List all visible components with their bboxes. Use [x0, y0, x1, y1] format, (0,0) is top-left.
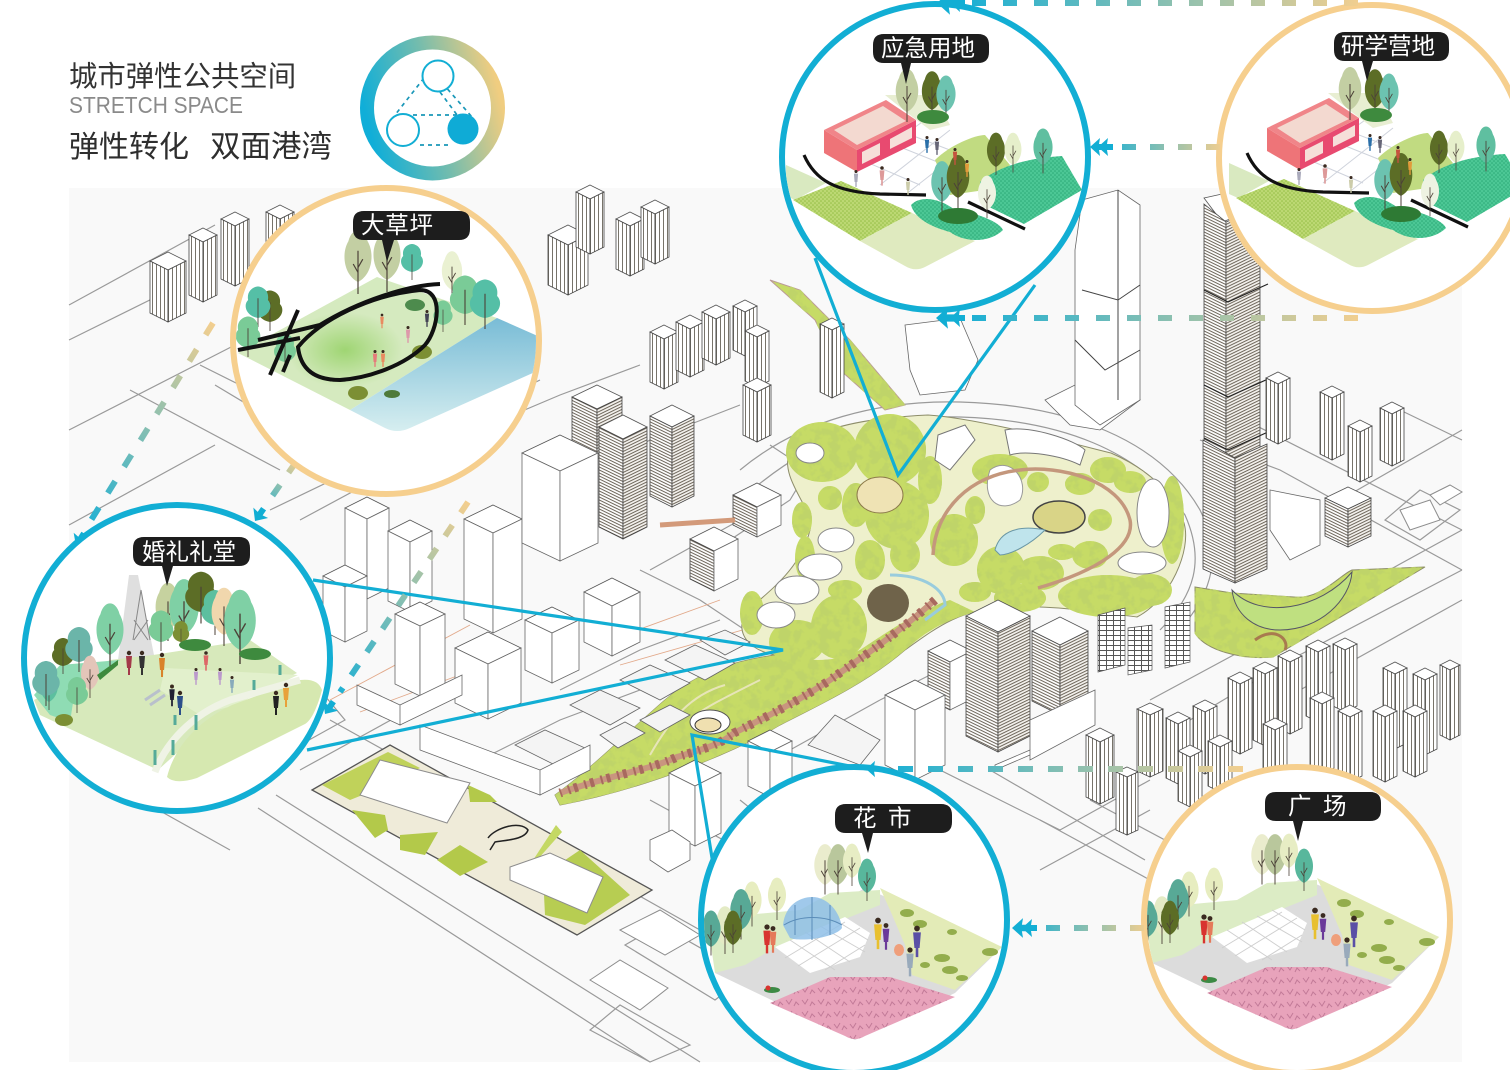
flower belt — [560, 600, 935, 793]
circle: study camp — [1219, 5, 1510, 311]
circle: square — [1138, 767, 1450, 1070]
label: square: 广 — [1288, 793, 1312, 819]
bottom left lot — [312, 745, 652, 935]
title block: STRETCH SPACE — [69, 92, 243, 118]
leader lines: wedding hall — [307, 580, 783, 750]
map background panel — [69, 188, 1462, 1062]
glass dome — [783, 897, 842, 940]
dashed arrow: square to flower market — [1012, 918, 1146, 938]
dashed arrow: study camp to emergency land — [1090, 138, 1220, 156]
ground of wedding vignette — [34, 640, 297, 770]
logo: stretch space — [367, 42, 498, 174]
label: square — [1265, 792, 1381, 841]
circle: big lawn — [233, 188, 540, 494]
circle: emergency land — [782, 4, 1088, 310]
grey paving — [715, 888, 1002, 1040]
wedding guests — [126, 651, 289, 765]
white low-rise and towers, left cluster — [323, 497, 792, 872]
white path — [155, 680, 300, 772]
park cream ground — [555, 415, 1186, 805]
dark hatched towers, left of park — [522, 385, 781, 591]
lawn — [935, 135, 1010, 195]
circle: wedding hall — [24, 505, 330, 811]
title block: 弹性转化 — [69, 131, 189, 164]
plaza grid — [826, 115, 965, 200]
central park area — [555, 414, 1186, 805]
circle: flower market — [701, 767, 1007, 1070]
dashed arrow: park to wedding hall — [318, 502, 468, 719]
central hatched towers and grid towers — [885, 600, 1190, 780]
meadow — [880, 888, 1002, 990]
trees of wedding vignette — [32, 572, 271, 726]
tower of wedding hall — [118, 575, 155, 660]
trees of lawn vignette — [236, 228, 500, 400]
light field — [860, 213, 975, 269]
black road — [804, 155, 1025, 229]
label: emergency land: 应急用地 — [881, 35, 975, 61]
label: big lawn — [353, 211, 470, 262]
title block: 双面港湾 — [210, 130, 332, 164]
trees of market — [701, 844, 876, 956]
dashed arrow: top link — [937, 0, 1368, 15]
picnic people — [373, 310, 429, 367]
dashed arrow: lawn to wedding hall — [248, 462, 296, 526]
mid-rise blocks along boulevard — [515, 630, 880, 765]
trees — [896, 69, 1053, 224]
hatched residential towers, top middle — [650, 300, 978, 442]
tall towers, centre right — [1045, 190, 1462, 583]
residential slabs, bottom right — [1086, 638, 1460, 835]
leader lines: flower market — [692, 735, 880, 870]
dashed arrow: square to flower market upper — [866, 761, 1245, 777]
label: square: 场 — [1323, 793, 1346, 819]
label: big lawn: 大草坪 — [361, 212, 433, 238]
road network — [69, 225, 1462, 1062]
meadow shrubs — [900, 909, 998, 981]
label: flower market: 市 — [888, 805, 912, 831]
people — [854, 136, 969, 195]
hatched field — [793, 181, 912, 241]
label: wedding hall: 婚礼礼堂 — [142, 539, 236, 565]
pink flower field — [770, 977, 955, 1039]
top green strip behind emergency callout — [770, 280, 905, 410]
right lawn — [167, 680, 322, 781]
central lawn — [294, 316, 396, 384]
lime planting — [555, 414, 1184, 805]
red building — [824, 100, 916, 172]
black paths on lawn — [238, 284, 440, 380]
dashed arrow: lower link under emergency land — [936, 307, 1368, 329]
right side park — [1195, 567, 1425, 658]
river — [350, 318, 540, 431]
label: study camp — [1334, 32, 1449, 81]
dashed arrow: south-west to wedding hall — [68, 323, 213, 551]
label: emergency land — [873, 34, 989, 84]
title block — [69, 61, 332, 164]
people of market — [763, 918, 921, 993]
title block: 城市弹性公共空间 — [69, 61, 296, 93]
green patches — [708, 890, 880, 973]
label: flower market — [835, 804, 952, 853]
leader lines: emergency land — [815, 258, 1035, 475]
buildings in park — [935, 425, 975, 470]
white grid plaza — [775, 917, 870, 973]
ground of lawn vignette — [238, 277, 497, 410]
label: study camp: 研学营地 — [1341, 33, 1435, 59]
residential towers, top left — [150, 185, 669, 322]
hatched green — [980, 156, 1082, 224]
label: flower market: 花 — [853, 805, 876, 831]
label: wedding hall — [133, 537, 250, 586]
